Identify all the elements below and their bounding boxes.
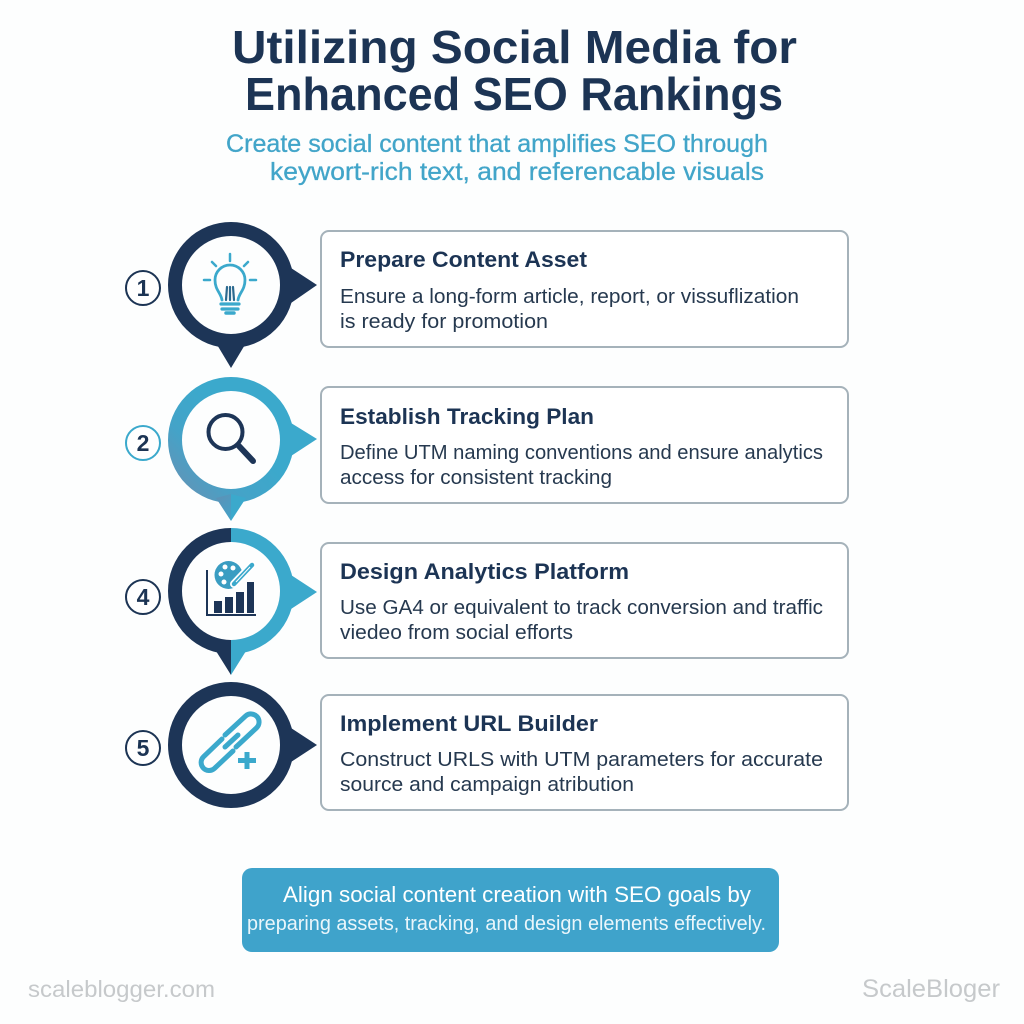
- step 2 number badge: [126, 426, 160, 460]
- callout banner: Align social content creation with SEO goals by: [283, 882, 751, 907]
- footer: website: scaleblogger.com: [28, 976, 215, 1002]
- title: Enhanced SEO Rankings: [245, 68, 783, 120]
- step 2 number badge: 2: [137, 430, 149, 456]
- callout banner: [242, 868, 779, 952]
- subtitle: Create social content that amplifies SEO through: [226, 130, 768, 158]
- step 2 card: Define UTM naming conventions and ensure analytics: [340, 441, 823, 464]
- step 5 card: Construct URLS with UTM parameters for accurate: [340, 748, 823, 771]
- step 4 card: [321, 543, 848, 658]
- step 1 number badge: [126, 271, 160, 305]
- panel: step 2: [126, 384, 848, 521]
- step 1 card: Prepare Content Asset: [340, 247, 588, 272]
- subtitle: [226, 130, 768, 186]
- icon: light bulb: [204, 254, 256, 313]
- step 4 number badge: 4: [137, 584, 150, 610]
- step 4 card: Design Analytics Platform: [340, 559, 629, 584]
- step 5 number badge: [126, 731, 160, 765]
- step 5 card: source and campaign atribution: [340, 773, 634, 796]
- panel: step 5: [126, 689, 848, 810]
- step 2 card: access for consistent tracking: [340, 466, 612, 489]
- footer: brand: ScaleBloger: [862, 975, 1000, 1003]
- step 5 number badge: 5: [137, 735, 150, 761]
- step 1 pin ring: [175, 229, 317, 368]
- icon: palette and bar chart: [207, 561, 256, 615]
- step 1 card: [321, 231, 848, 347]
- step 2 pin ring: [175, 384, 317, 521]
- step 5 card: [321, 695, 848, 810]
- step 4 pin ring: [175, 535, 317, 675]
- step 1 card: is ready for promotion: [340, 310, 548, 333]
- title: [232, 21, 797, 120]
- panel: step 4: [126, 535, 848, 675]
- subtitle: keywort-rich text, and referencable visuals: [270, 158, 764, 186]
- icon: chain link with plus: [201, 714, 259, 770]
- step 2 card: [321, 387, 848, 503]
- step 4 card: viedeo from social efforts: [340, 621, 573, 644]
- icon: magnifying glass: [208, 415, 253, 461]
- step 4 number badge: [126, 580, 160, 614]
- step 2 card: Establish Tracking Plan: [340, 404, 594, 429]
- step 1 number badge: 1: [137, 275, 150, 301]
- title: Utilizing Social Media for: [232, 21, 797, 73]
- panel: step 1: [126, 229, 848, 368]
- callout banner: preparing assets, tracking, and design elements effectively.: [247, 913, 766, 935]
- step 1 card: Ensure a long-form article, report, or vissuflization: [340, 285, 799, 308]
- step 5 card: Implement URL Builder: [340, 711, 598, 736]
- step 5 pin ring: [175, 689, 317, 801]
- step 4 card: Use GA4 or equivalent to track conversion and traffic: [340, 596, 823, 619]
